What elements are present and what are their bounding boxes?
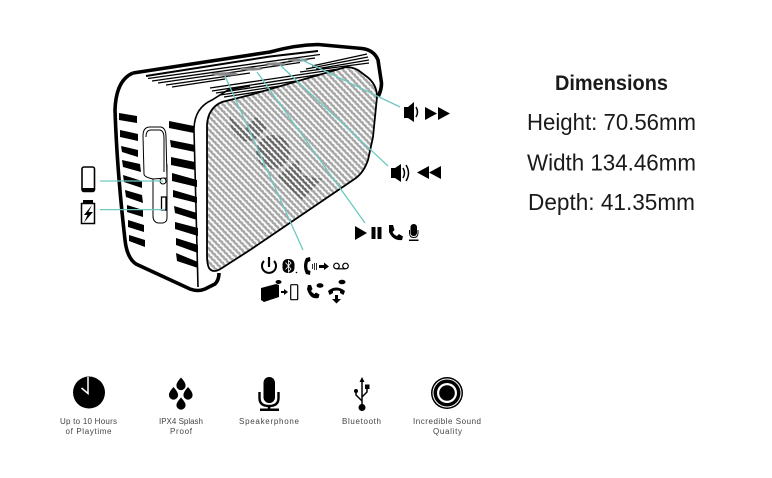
speaker body outline [115, 44, 382, 290]
feature: sound quality: Quality [433, 427, 462, 436]
feature: splash proof: IPX4 Splash [159, 417, 203, 426]
top surface stripes [146, 51, 369, 97]
icon row: pairing and call handling [261, 280, 346, 304]
feature: sound quality: Incredible Sound [413, 417, 481, 426]
control buttons [212, 58, 308, 76]
feature: speakerphone: Speakerphone [239, 417, 300, 426]
icon: battery charging [82, 200, 94, 224]
port cover [143, 127, 167, 223]
width: Width 134.46mm [527, 150, 696, 176]
side stripes left column [119, 113, 145, 247]
feature: splash proof: Proof [170, 427, 193, 436]
depth: Depth: 41.35mm [528, 189, 695, 215]
feature: usb [342, 377, 381, 426]
dimensions block [527, 72, 696, 215]
icon: volume up and forward [404, 102, 450, 122]
icon: play pause call mic [355, 224, 418, 241]
front speaker grill [207, 67, 377, 271]
feature: usb: Bluetooth [342, 417, 381, 426]
front band outline [194, 86, 250, 287]
heading: Dimensions [555, 72, 668, 95]
speaker illustration [115, 44, 382, 290]
height: Height: 70.56mm [527, 109, 696, 135]
logo [230, 116, 322, 200]
icon row: power bluetooth call voicemail [262, 257, 348, 275]
side stripes right column [169, 121, 198, 268]
feature: splash proof [159, 378, 203, 436]
feature: playtime [60, 376, 117, 436]
feature: speakerphone [239, 377, 300, 426]
icon: phone [82, 167, 94, 192]
feature: playtime: Up to 10 Hours [60, 417, 117, 426]
icon: volume down and rewind [391, 164, 441, 182]
feature: playtime: of Playtime [66, 427, 112, 436]
callout lines [100, 59, 400, 250]
feature: sound quality [413, 377, 481, 436]
